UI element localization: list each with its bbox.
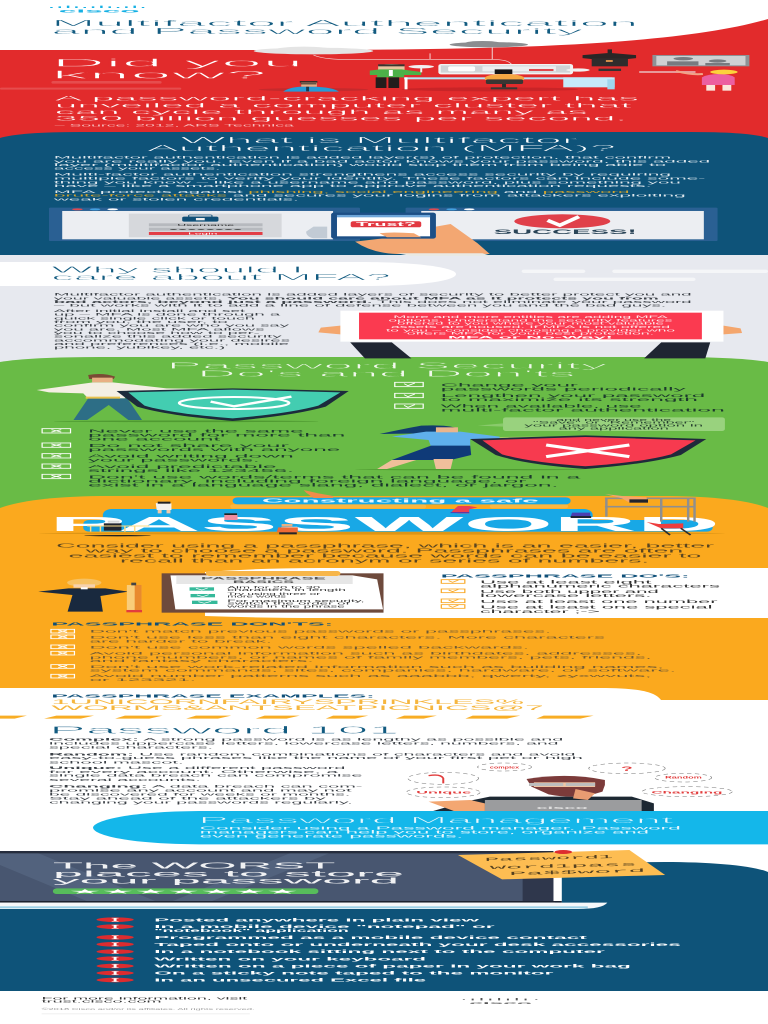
- list: password don'ts: Never use the same: [88, 429, 304, 434]
- text: MFA definition: weak or stolen credentials.: [54, 197, 299, 202]
- heading: password 101: Password 101: [49, 725, 399, 736]
- list: passphrase don'ts: are harder to break.: [90, 639, 272, 644]
- list: passphrase don'ts: system commands, sites, companies, hardware, or software.: [90, 668, 676, 673]
- list: worst places: Posted anywhere in plain view: [154, 918, 481, 923]
- heading: worst places: [53, 862, 405, 886]
- callout: never use save: [478, 417, 725, 431]
- text: password 101 definitions: be discovered for weeks or months.: [49, 792, 350, 797]
- banner: constructing a safe password: PASSWORD: [49, 513, 720, 536]
- list: passphrase do's: Use at least eight: [480, 580, 654, 585]
- list: worst places: [96, 917, 681, 983]
- heading: did you know: know?: [51, 68, 269, 81]
- callout: MFA or no-way sign: More and more entities are adding MFA: [393, 315, 668, 319]
- heading: worst places: your password: [53, 877, 400, 886]
- text: MFA definition: Multifactor authentication is added layer(s) of protection, that confirm: [54, 155, 671, 160]
- text: MFA definition: access your assets.: [54, 166, 220, 171]
- callout: never use save: "Save" or "Remember": [533, 420, 697, 424]
- heading: did you know: Did you: [51, 56, 304, 69]
- illustration: construction workers: [84, 490, 695, 536]
- illustration: login screen: ••••••••: [169, 228, 249, 231]
- list: worst places: In a mobile device "notepad" or: [154, 925, 498, 930]
- illustration: office scene: [254, 41, 749, 92]
- passphrase examples: WORMS&ANTSEATPICNICS@7: [51, 704, 544, 712]
- heading: do's and don'ts: [167, 361, 610, 379]
- list: password don'ts: your passwords.: [88, 458, 262, 463]
- password dots pill: [53, 888, 318, 895]
- text: password 101 definitions: [49, 737, 584, 805]
- list: password don'ts: Avoid writing down: [88, 454, 294, 459]
- text: MFA definition: have – like a smartphone app to approve authentication requests.: [54, 184, 651, 189]
- list: worst places: Written on a piece of paper in your work bag: [154, 964, 633, 969]
- illustration: clipboard with passphrase basics: For maximum security,: [227, 599, 364, 603]
- text: passphrase intro: easiest to remember because words can be easier to: [69, 553, 702, 559]
- illustration: man: [37, 374, 318, 422]
- illustration: login screen: [49, 208, 360, 241]
- text: MFA column: [54, 309, 292, 350]
- list: password do's: When available, use: [441, 404, 642, 409]
- text: password 101 definitions: several accounts.: [49, 778, 201, 783]
- callout: never use save: and never use the: [556, 418, 674, 422]
- text: MFA definition: brute-force attacks and secures your logins from attackers exploiting: [54, 193, 687, 198]
- illustration: login screen: Login: [188, 232, 218, 235]
- text: password 101 definitions: changing your passwords regularly.: [49, 800, 353, 805]
- stat: password cracking: unveiled a computer cluster that: [55, 102, 636, 109]
- callout: password management: Consider using a Password manager. Password: [200, 826, 681, 831]
- callout: MFA or no-way sign: offered to you where your most valuable: [397, 321, 666, 325]
- list: passphrase do's: [441, 574, 722, 615]
- callout: MFA or no-way sign: assets are housed. If MFA is not offered: [391, 325, 672, 329]
- text: password 101 definitions: easy-to-guess phrases like the name of your first pet or high: [49, 756, 584, 761]
- text: MFA column: you are. Most MFA allows: [54, 327, 267, 332]
- text: MFA column: you to choose how to per-: [54, 331, 261, 336]
- illustration: clipboard with passphrase basics: PASSPHRASE: [201, 576, 326, 580]
- list: passphrase don'ts: Don't use common words spelled backwards.: [90, 645, 529, 650]
- list: passphrase don'ts: [51, 622, 676, 683]
- text: MFA intro: bad actors, beyond just a password. This does not eliminate your password: [54, 300, 693, 305]
- banner: constructing a safe password: Constructing a safe: [262, 499, 541, 504]
- title: and Password Security: [51, 27, 585, 36]
- text: MFA column: quick single click or touch: [54, 316, 256, 321]
- stat: password cracking: can cycle through as many as: [55, 108, 588, 116]
- white heading blob: [0, 262, 456, 286]
- list: password don'ts: password for more than: [88, 433, 345, 438]
- panel: blue MFA background: [0, 132, 768, 256]
- text: password 101 definitions: for every account. Otherwise, a: [49, 770, 339, 775]
- illustration: thinking man with bubbles: Changing: [651, 790, 724, 794]
- text: MFA column: from you, the user, to: [54, 320, 229, 325]
- illustration: hand holding phone: Trust?: [356, 222, 416, 228]
- list: passphrase do's: character ;->: [480, 610, 600, 615]
- stat: password cracking: A password-cracking expert has: [55, 95, 639, 102]
- password dots pill: ★★★★★★★: [69, 888, 300, 895]
- text: MFA intro: – but works with it to add a line of defense between you and the bad guys.: [54, 303, 666, 308]
- icon: sticky note with passwords: Pa$$word: [509, 868, 646, 877]
- illustration: login screen: Username: [177, 224, 235, 227]
- text: MFA definition: [54, 155, 712, 202]
- icon: sticky note with passwords: Password1: [485, 854, 615, 863]
- heading: why care: [51, 266, 393, 282]
- text: MFA intro: your valuable assets. You should care about MFA as it protects you from: [54, 296, 659, 301]
- text: MFA column: sonalize this added security: [54, 334, 284, 339]
- heading: what is MFA: [147, 137, 617, 153]
- illustration: clipboard with passphrase basics: switch the order of: [227, 601, 353, 605]
- list: password do's: Change your: [441, 383, 579, 388]
- decorative cloud streaks: [522, 270, 768, 281]
- list: password do's: Lengthen your password: [441, 394, 705, 399]
- heading: worst places: The WORST: [53, 862, 338, 871]
- list: worst places: Programmed as a mobile device contact: [154, 936, 587, 941]
- illustration: hand holding phone: [306, 213, 491, 256]
- list: password do's: passwords periodically: [441, 387, 687, 392]
- text: MFA definition: MFA protects against phishing, social engineering and password: [54, 190, 631, 195]
- illustration: clipboard with passphrase basics: [162, 571, 384, 613]
- text: MFA intro: Multifactor authentication is added layers of security to better protect you and: [54, 292, 693, 297]
- icon: red shield: [470, 435, 706, 469]
- illustration: thinking man with bubbles: cisco: [536, 806, 590, 810]
- list: worst places: In an unsecured Excel file: [154, 978, 426, 983]
- illustration: success screen: SUCCESS!: [494, 228, 637, 236]
- callout: password management: even generate passwords.: [200, 834, 465, 839]
- list: passphrase don'ts: Avoid number patterns such as aaabbb, qwerty, zyxwvuts,: [90, 674, 651, 679]
- list: password do's: [395, 382, 725, 413]
- text: MFA intro: [54, 292, 693, 308]
- text: passphrase intro: way to choose a password. Passphrases are often: [82, 548, 684, 554]
- text: MFA column: phone, yubikey, etc.): [54, 345, 227, 350]
- callout: password management: Password Management: [198, 816, 673, 825]
- illustration: thinking man with bubbles: Random: [665, 775, 702, 779]
- list: password don'ts: passwords with anyone: [88, 448, 340, 453]
- text: passphrase intro: [56, 543, 717, 564]
- list: passphrase don'ts: Don't use less than eight characters. More characters: [90, 635, 607, 640]
- text: MFA column: and preferences (i.e., mobile: [54, 342, 290, 347]
- callout: MFA or no-way sign: offers MFA for your best protection.: [407, 331, 654, 335]
- text: password 101 definitions: Random: Use random combinations of characters and avoid: [49, 752, 577, 757]
- heading: did you know: [51, 56, 304, 81]
- list: password don'ts: exist in a language slang, dialect, or jargon.: [88, 483, 561, 488]
- footer: ©2018 Cisco and/or its affiliates. All rights reserved.: [42, 1008, 255, 1011]
- banner: constructing a safe password: [39, 497, 725, 536]
- source note: – Source: 2012, ARS Technica: [55, 123, 295, 128]
- panel: orange passphrase background: [0, 496, 768, 702]
- passphrase examples: PASSPHRASE EXAMPLES:: [51, 694, 375, 699]
- text: MFA column: accommodating your desires: [54, 338, 292, 343]
- callout: password management: managers can help you to store, organize and: [200, 830, 649, 835]
- heading: why care: care about MFA?: [51, 274, 393, 282]
- decorative orange dashes: [0, 716, 594, 719]
- logo: Cisco footer: [464, 998, 536, 1005]
- list: password do's: to maximize its strength: [441, 398, 698, 403]
- list: passphrase do's: Use at least one number: [480, 600, 719, 605]
- panel: light grey why-care background: [0, 255, 768, 365]
- illustration: clipboard with passphrase basics: Aim for 20 to 30: [227, 585, 323, 589]
- logo: Cisco top: cisco: [59, 9, 142, 14]
- text: MFA definition: multiple factors to verify your identity. These factors can include some-: [54, 176, 707, 181]
- illustration: clipboard with passphrase basics: words in the phrase: [227, 604, 347, 608]
- footer: trust.cisco.com: [42, 999, 162, 1003]
- text: password 101 definitions: school mascot.: [49, 760, 184, 765]
- icon: sticky note with passwords: Word1pass: [490, 861, 639, 871]
- list: password don'ts: strings like 123456.: [88, 469, 296, 474]
- callout: never use save: your password option in: [524, 423, 703, 427]
- icon: sticky note with passwords: [458, 850, 665, 879]
- footer: [42, 996, 255, 1014]
- list: passphrase do's: PASSPHRASE DO'S:: [441, 574, 690, 579]
- list: passphrase don'ts: or 123321.: [90, 678, 196, 683]
- text: passphrase intro: recall than an acronym or series of numbers.: [120, 558, 649, 564]
- list: passphrase don'ts: Don't match previous passwords or passphrases.: [90, 629, 551, 634]
- list: password don'ts: dictionary, including foreign language, or: [88, 479, 527, 484]
- text: password 101 definitions: includes uppercase letters, lowercase letters, numbers, and: [49, 741, 560, 746]
- text: MFA column: confirm you are who you say: [54, 323, 291, 328]
- text: password 101 definitions: single data breach can compromise: [49, 773, 364, 778]
- illustration: thinking man with bubbles: Unique: [416, 790, 474, 794]
- text: MFA definition: you are really you. Even if a bad actor knows your password, this added: [54, 159, 712, 164]
- title: Multifactor Authentication: [51, 19, 638, 28]
- illustration: thinking man with bubbles: ?: [621, 765, 633, 773]
- text: password 101 definitions: Unique: Use a different password: [49, 766, 347, 771]
- heading: worst places: places to store: [53, 870, 405, 879]
- heading: do's and don'ts: Password Security: [167, 361, 610, 371]
- logo: Cisco footer: cisco: [469, 1002, 536, 1005]
- text: MFA definition: layer (multifactor authentication) would stop them from being able to: [54, 163, 668, 168]
- list: worst places: On a sticky note taped to the monitor: [154, 971, 557, 976]
- list: passphrase do's: alphanumeric characters: [480, 584, 722, 589]
- passphrase examples: 1UNICORNFAIRYSPRINKLES%: [51, 698, 525, 706]
- list: passphrase do's: Use both upper and: [480, 590, 659, 595]
- text: MFA definition: Multi-factor authentication strengthens access security by requiring: [54, 172, 672, 177]
- list: password do's: multi-factor authentication: [441, 408, 725, 413]
- list: passphrase do's: lowercase letters.: [480, 594, 651, 599]
- text: password 101 definitions: promise any account and may not: [49, 788, 354, 793]
- callout: MFA or no-way sign: to you – consider choosing a provider who: [386, 328, 677, 332]
- illustration: clipboard with passphrase basics: Try using three or: [227, 592, 322, 596]
- white band behind clipboard: [205, 568, 768, 618]
- heading: what is MFA: What is Multifactor: [180, 137, 580, 145]
- list: passphrase don'ts: and fantasy characters.: [90, 659, 313, 664]
- heading: do's and don'ts: Do's and Don'ts: [197, 369, 578, 379]
- text: MFA definition: thing you know – like a username and password, plus something you: [54, 180, 682, 185]
- callout: never use save: any application: [559, 426, 669, 430]
- list: password don'ts: [42, 429, 585, 488]
- logo: Cisco top: [51, 6, 143, 14]
- heading: what is MFA: Authentication (MFA)?: [147, 145, 617, 153]
- passphrase examples: [51, 694, 544, 712]
- illustration: thinking man with bubbles: [407, 763, 732, 812]
- panel: green do's and don'ts background: [0, 357, 768, 512]
- list: passphrase don'ts: phone numbers, or names of family members, pets, friends,: [90, 655, 651, 660]
- icon: green shield: [117, 388, 349, 421]
- title: [51, 19, 638, 36]
- illustration: arms holding sign: [318, 326, 742, 358]
- panel: blue worst-places background: [0, 862, 768, 991]
- illustration: success screen: [406, 208, 718, 241]
- list: password don'ts: one account: [88, 437, 223, 442]
- illustration: monitor: [0, 851, 607, 909]
- list: passphrase don'ts: Don't use work-related information such as building names,: [90, 665, 664, 670]
- panel: red did-you-know background: [0, 19, 768, 140]
- list: password don'ts: Don't use words/terms that can be found in a: [88, 475, 585, 480]
- callout: MFA or no-way sign: MFA or No-Way!: [448, 335, 616, 339]
- decorative speed lines: [0, 81, 181, 90]
- illustration: woman: [355, 425, 585, 470]
- text: password 101 definitions: Changing: A data breach can com-: [49, 784, 364, 789]
- callout: password management: [93, 811, 768, 844]
- text: password 101 definitions: Stay ahead of the attackers by: [49, 796, 328, 801]
- list: passphrase don'ts: PASSPHRASE DON'TS:: [51, 622, 333, 627]
- illustration: clipboard with passphrase basics: BASICS: [233, 580, 294, 584]
- callout: MFA or no-way sign: [340, 311, 723, 342]
- list: worst places: Taped onto or underneath your desk accessories: [154, 943, 681, 948]
- list: worst places: In a notebook sitting next to the computer: [154, 950, 608, 955]
- panel: white password 101 background: [0, 688, 768, 1024]
- text: password 101 definitions: special characters.: [49, 745, 213, 750]
- list: password don'ts: Do not share your: [88, 444, 290, 449]
- text: MFA column: up – MFA is done through a: [54, 312, 281, 317]
- text: password 101 definitions: Complex: A strong password is as lengthy as possible and: [49, 737, 565, 742]
- list: worst places: "notebook" application: [154, 929, 350, 934]
- illustration: thinking man with bubbles: complex: [490, 765, 520, 769]
- list: worst places: Written on your keyboard: [154, 957, 428, 962]
- list: passphrase don'ts: Avoid personal information such as birthdates, addresses,: [90, 651, 642, 656]
- text: MFA column: After initial install and set: [54, 309, 247, 314]
- illustration: clipboard with passphrase basics: more words: [227, 594, 286, 598]
- stat: password cracking: [55, 95, 639, 122]
- callout: MFA or no-way sign: options. Understand the security features: [388, 318, 675, 322]
- stat: password cracking: 350 billion guesses per second.: [55, 115, 627, 122]
- illustration: clipboard with passphrase basics: characters in length: [227, 588, 346, 592]
- illustration: woman with pencil: [38, 579, 142, 612]
- footer: For more information, visit: [42, 996, 250, 1000]
- text: passphrase intro: Consider using a passphrase, which is an easier, better: [56, 543, 717, 549]
- heading: why care: Why should I: [51, 266, 304, 275]
- list: password don'ts: Avoid predictable: [88, 465, 277, 470]
- list: passphrase do's: Use at least one special: [480, 605, 713, 610]
